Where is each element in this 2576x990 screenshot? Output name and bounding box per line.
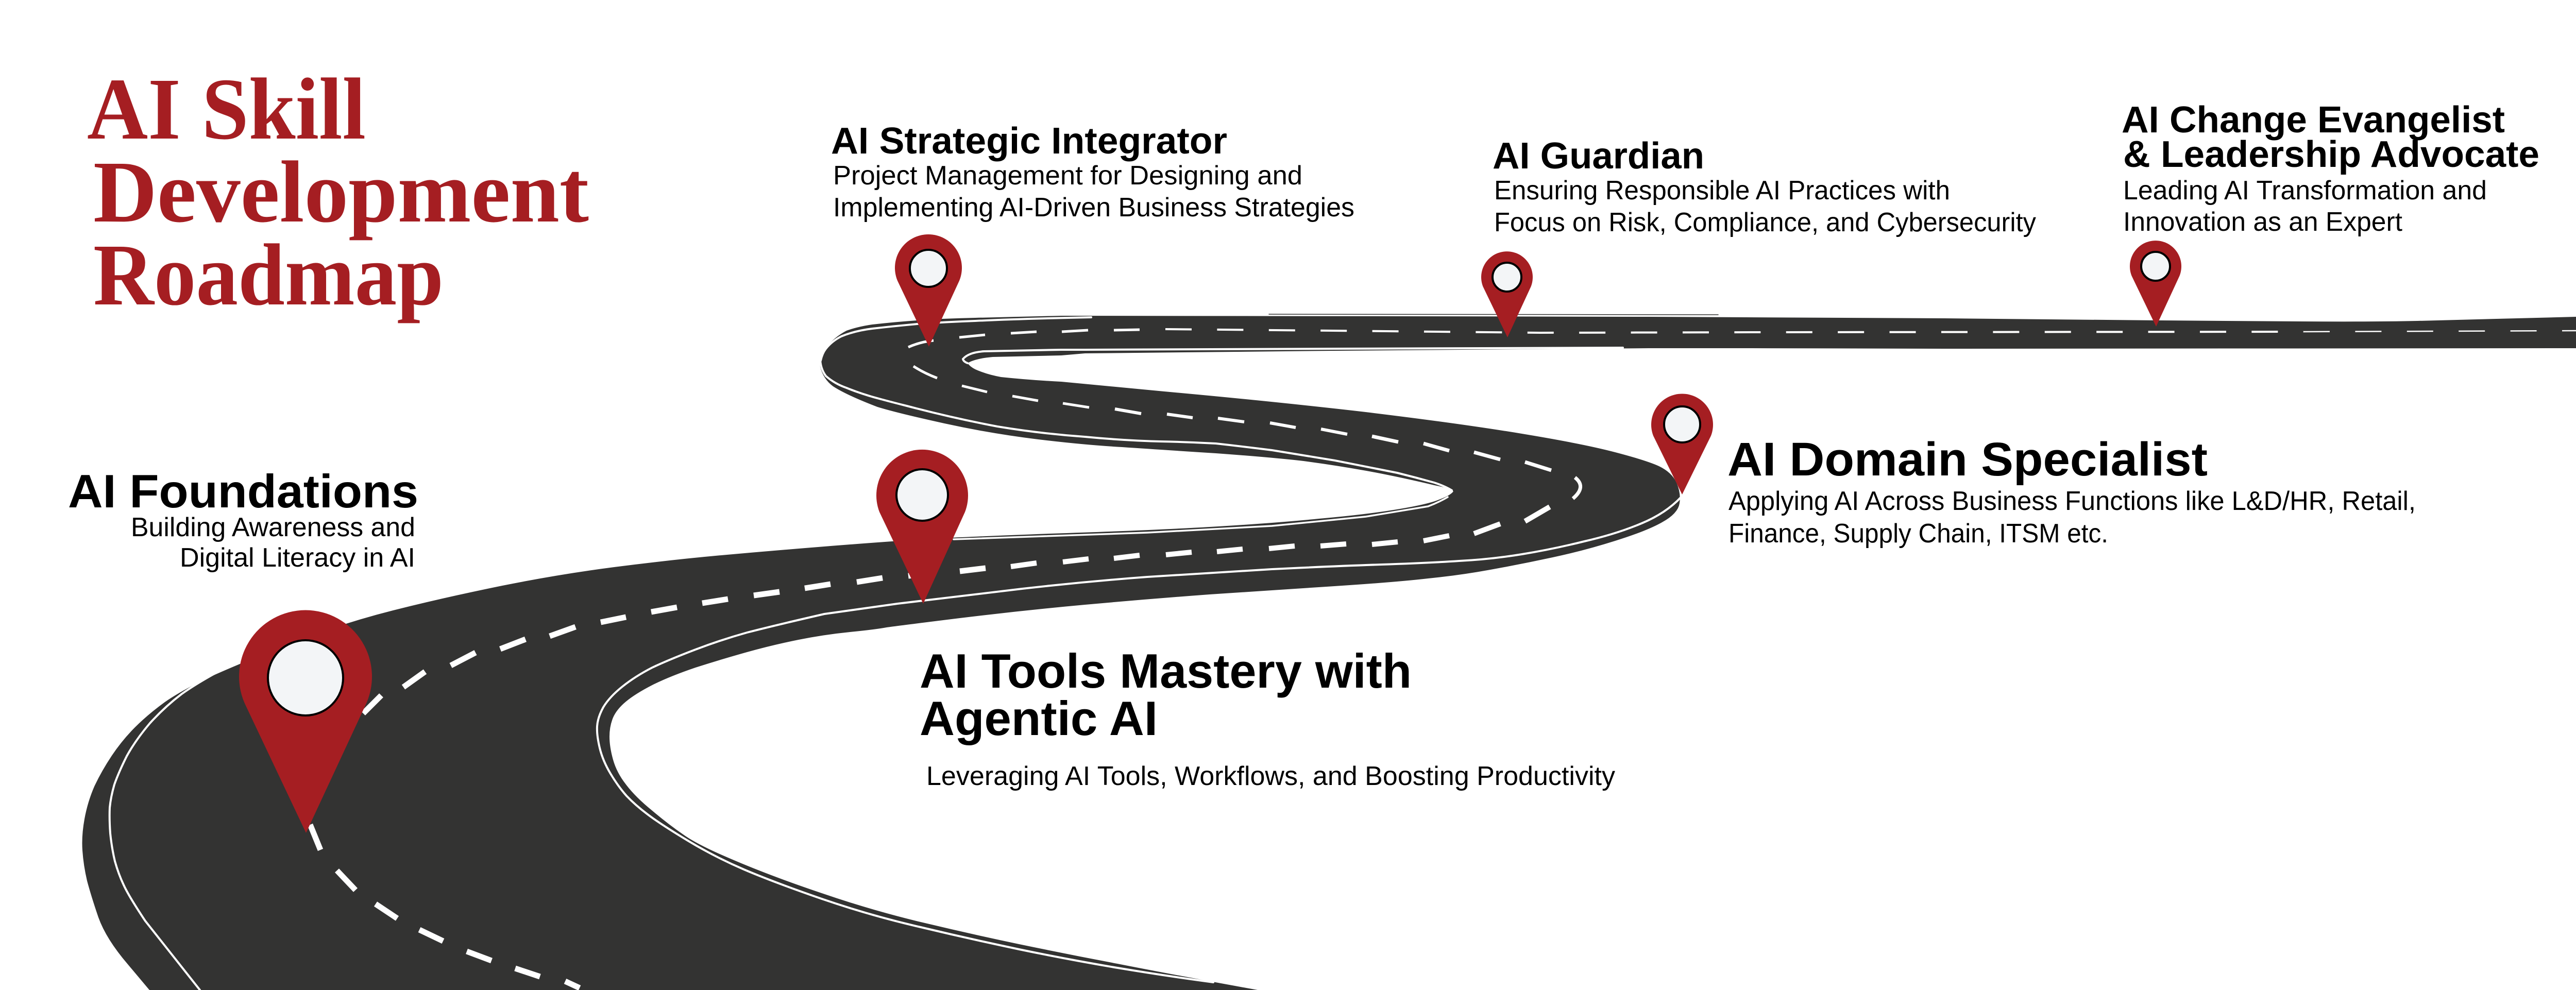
description: AI Strategic Integrator [833,161,1354,223]
heading: AI Change Evangelist & Leadership Advocate [2122,99,2539,175]
description: AI Guardian [1494,176,2036,237]
title: Roadmap [93,226,444,323]
description: AI Guardian: Ensuring Responsible AI Practices with [1494,176,1950,206]
description: AI Domain Specialist: Applying AI Across Business Functions like L&D/HR, Retail, [1728,486,2416,516]
pin 2: AI Tools Mastery [876,450,968,604]
description: AI Strategic Integrator: Implementing AI-Driven Business Strategies [833,193,1354,223]
road surface [82,316,2576,990]
description: AI Guardian: Focus on Risk, Compliance, and Cybersecurity [1494,208,2036,237]
milestone text: AI Domain Specialist [1727,433,2416,549]
heading: AI Change Evangelist & Leadership Advocate: & Leadership Advocate [2123,134,2539,175]
title [87,60,589,323]
description: AI Foundations [131,513,415,573]
pin 4: AI Guardian [1481,251,1533,337]
pin 3: AI Strategic Integrator [895,234,962,347]
milestone text: AI Change Evangelist [2122,99,2539,237]
description: AI Domain Specialist [1728,486,2416,549]
description: AI Change Evangelist: Innovation as an Expert [2123,207,2403,237]
description: AI Tools Mastery: Leveraging AI Tools, Workflows, and Boosting Productivity [926,761,1615,791]
winding road [82,314,2576,990]
pin 6: AI Change Evangelist [2130,241,2181,327]
heading: AI Guardian: AI Guardian [1493,135,1704,177]
milestone text: AI Strategic Integrator [831,121,1354,223]
title: AI Skill [87,60,366,158]
heading: AI Foundations: AI Foundations [68,466,418,518]
heading: AI Tools Mastery with Agentic AI: AI Tools Mastery with [920,644,1412,698]
heading: AI Change Evangelist & Leadership Advocate: AI Change Evangelist [2122,99,2505,141]
road edge lines [110,314,1718,990]
description: AI Foundations: Building Awareness and [131,513,415,542]
heading: AI Tools Mastery with Agentic AI [920,644,1412,745]
title: Development [93,143,589,241]
pin 1: AI Foundations [239,610,372,833]
milestone text: AI Guardian [1493,135,2036,237]
pin 5: AI Domain Specialist [1651,394,1713,494]
description: AI Change Evangelist [2123,176,2487,237]
heading: AI Domain Specialist: AI Domain Specialist [1727,433,2208,486]
centre lane dashes [310,329,2576,988]
description: AI Foundations: Digital Literacy in AI [180,543,415,573]
milestone text: AI Foundations [68,466,418,573]
heading: AI Strategic Integrator: AI Strategic Integrator [831,121,1227,162]
description: AI Strategic Integrator: Project Management for Designing and [833,161,1302,191]
milestone text: AI Tools Mastery [920,644,1615,791]
heading: AI Tools Mastery with Agentic AI: Agentic AI [920,691,1158,745]
description: AI Change Evangelist: Leading AI Transformation and [2123,176,2487,206]
description: AI Domain Specialist: Finance, Supply Chain, ITSM etc. [1728,519,2108,549]
